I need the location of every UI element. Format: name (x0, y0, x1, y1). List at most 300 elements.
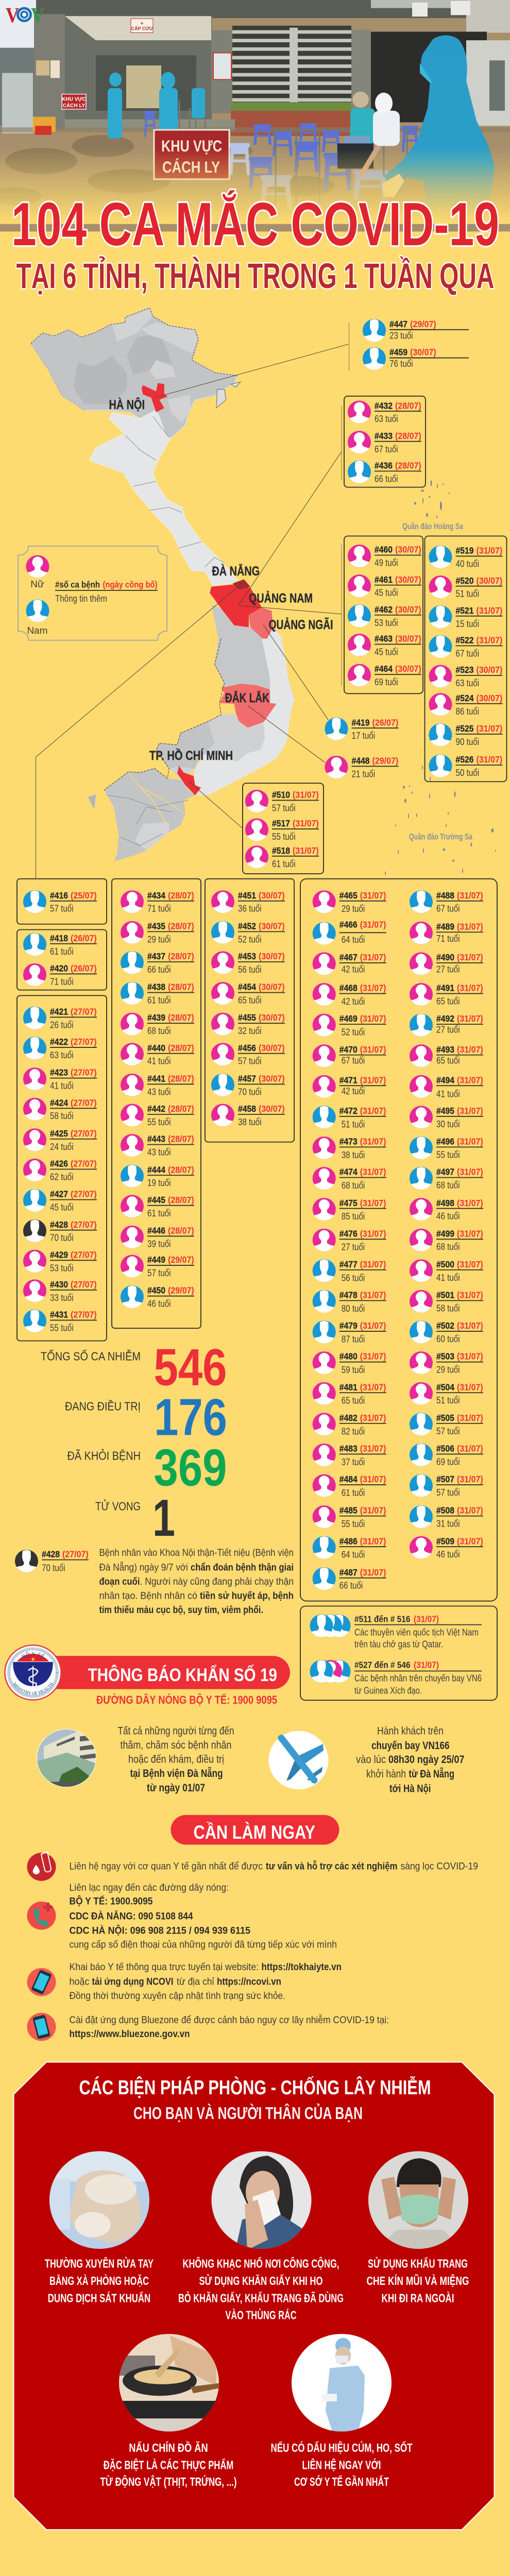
action: contact health agency: Liên hệ ngay với cơ quan Y tế gần nhất để được (69, 1861, 263, 1872)
region: Đà Nẵng (232, 580, 250, 590)
panel: Quảng Nam cases 30/07 (344, 536, 423, 693)
case #517: (31/07) (293, 818, 319, 828)
case #519: 40 tuổi (455, 558, 479, 569)
imported: seafarers #511-516: (31/07) (414, 1614, 439, 1624)
icon: phone and medical cross (27, 1902, 56, 1930)
case #429: #429 (50, 1250, 68, 1260)
legend panel (18, 546, 167, 640)
case #443 (121, 1134, 194, 1158)
case #437: 66 tuổi (147, 964, 171, 975)
imported: seafarers #511-516 (309, 1614, 482, 1649)
imported: seafarers #511-516: trên tàu chở gas từ Qatar. (354, 1639, 443, 1649)
logo: VOV: V (6, 3, 19, 27)
case #489: #489 (436, 922, 454, 932)
case #500: (31/07) (457, 1259, 483, 1269)
case #441 (121, 1074, 194, 1097)
emergency sign: CẤP CỨU (131, 26, 152, 31)
case #497: #497 (436, 1167, 454, 1177)
case #493: 65 tuổi (436, 1055, 460, 1066)
case #434: #434 (147, 890, 166, 901)
text: hospital visitors: từ ngày 01/07 (147, 1781, 205, 1794)
case #523: #523 (455, 665, 474, 675)
case #474: (31/07) (360, 1167, 386, 1177)
caption: wash hands (45, 2256, 154, 2305)
case #452: #452 (238, 921, 256, 931)
stat: under treatment (65, 1387, 227, 1446)
region: Hà Nội (142, 383, 167, 412)
case #502: (31/07) (457, 1320, 483, 1331)
action: contact health agency: sàng lọc COVID-19 (401, 1861, 478, 1872)
case #457: 70 tuổi (238, 1087, 262, 1097)
small quarantine sign (62, 94, 86, 109)
case #428: #428 (50, 1219, 68, 1230)
logo: VOV: V (31, 3, 44, 27)
case #471: #471 (339, 1075, 358, 1086)
case #457: (30/07) (259, 1074, 285, 1084)
case #479: 87 tuổi (342, 1334, 365, 1345)
case #430: 33 tuổi (50, 1292, 74, 1303)
case #446 (121, 1226, 194, 1249)
case #499: #499 (436, 1229, 454, 1239)
case #472: #472 (339, 1106, 358, 1116)
case #450 (120, 1285, 194, 1309)
case #482: (31/07) (360, 1413, 386, 1423)
case #436: 66 tuổi (375, 473, 398, 484)
case #448 (Đắk Lắk): (29/07) (372, 756, 398, 766)
case #486: 64 tuổi (342, 1549, 365, 1560)
action: online health declaration (69, 1961, 342, 2002)
case #427: (27/07) (71, 1189, 97, 1199)
case #508 (409, 1505, 483, 1529)
case #526: #526 (455, 754, 474, 765)
imported: flight VN6 #527-546: (31/07) (414, 1660, 439, 1670)
caption: no spitting: VÀO THÙNG RÁC (226, 2308, 297, 2322)
case #460: #460 (375, 545, 393, 555)
case #424: 58 tuổi (50, 1111, 74, 1122)
case #427 (23, 1189, 97, 1213)
case #454 (211, 982, 285, 1006)
case #441: 43 tuổi (147, 1087, 171, 1097)
case #424 (23, 1098, 97, 1122)
Mekong delta (104, 768, 195, 861)
case #499: 68 tuổi (436, 1242, 460, 1252)
stat: deaths: TỬ VONG (95, 1499, 141, 1513)
case #471: 42 tuổi (342, 1086, 365, 1096)
legend: male icon (26, 600, 49, 622)
text: flight VN166 passengers: từ Đà Nẵng (409, 1767, 454, 1780)
case #446: #446 (147, 1226, 165, 1236)
caption: contact a health facility: NẾU CÓ DẤU HIỆU CÚM, HO, SỐT (271, 2441, 413, 2455)
case #492: #492 (436, 1013, 454, 1024)
case #458: 38 tuổi (238, 1117, 262, 1127)
case #451: (30/07) (259, 890, 285, 901)
case #422 (23, 1037, 97, 1060)
case #463 (348, 634, 421, 657)
large quarantine sign (154, 130, 229, 179)
case #505: (31/07) (457, 1413, 483, 1423)
case #428: (27/07) (71, 1219, 97, 1230)
case #498: 46 tuổi (436, 1211, 460, 1222)
case #490: #490 (436, 952, 454, 962)
action: contact health agency (69, 1860, 478, 1872)
case #452: (30/07) (259, 921, 285, 931)
case #447: (29/07) (410, 319, 436, 329)
case #500 (410, 1259, 483, 1283)
text: flight VN166 passengers: vào lúc (356, 1753, 386, 1766)
case #496 (409, 1137, 483, 1160)
region: Đắk Lắk (219, 684, 277, 727)
case #424: #424 (50, 1098, 69, 1108)
case #488: #488 (436, 890, 454, 901)
case #504 (410, 1382, 483, 1406)
icon: mobile phone 2 (27, 2013, 56, 2041)
case #470: (31/07) (360, 1044, 386, 1055)
case #418: 61 tuổi (50, 946, 74, 957)
case #482: #482 (339, 1413, 358, 1423)
photo fade into page background (0, 148, 510, 224)
case #425: #425 (50, 1128, 68, 1139)
case #473: 38 tuổi (342, 1150, 365, 1160)
islands: Trường Sa (385, 766, 496, 875)
case #495: 30 tuổi (436, 1118, 460, 1129)
case #423 (23, 1067, 97, 1091)
case #492: 27 tuổi (436, 1024, 460, 1035)
case #501: #501 (436, 1290, 454, 1300)
stat: under treatment: 176 (154, 1387, 227, 1446)
photo: cooking in a pan (119, 2334, 219, 2432)
case #524: #524 (455, 693, 474, 703)
caption: contact a health facility: LIÊN HỆ NGAY VỚI (302, 2458, 381, 2472)
case #517 (245, 818, 319, 842)
case #455 (211, 1012, 285, 1037)
case #494: #494 (436, 1075, 455, 1086)
case #426: (27/07) (71, 1159, 97, 1169)
case #453: 56 tuổi (238, 964, 262, 975)
case #458 (211, 1104, 285, 1127)
case #467: (31/07) (360, 952, 386, 962)
case #447: 23 tuổi (389, 330, 413, 341)
case #455: #455 (238, 1012, 256, 1023)
case #461 (348, 574, 421, 598)
stat: recovered (67, 1438, 227, 1497)
case #460 (348, 545, 421, 568)
action: online health declaration: hoặc (69, 1976, 90, 1988)
case #498 (410, 1198, 483, 1222)
case #501: 58 tuổi (436, 1303, 460, 1314)
photo: doctor in blue gown (292, 2334, 392, 2432)
case #479 (312, 1320, 386, 1345)
case #462: (30/07) (395, 604, 421, 615)
panel: imported cases (300, 1606, 497, 1700)
case #461: 45 tuổi (375, 587, 398, 598)
case #485 (313, 1505, 386, 1529)
imported: flight VN6 #527-546: từ Guinea Xích đạo. (354, 1685, 422, 1696)
caption: wear a mask: SỬ DỤNG KHẨU TRANG (368, 2256, 468, 2271)
case #435: (28/07) (168, 921, 194, 931)
case #504: (31/07) (457, 1382, 483, 1393)
case #518: (31/07) (293, 845, 319, 856)
case #520: (30/07) (476, 575, 502, 586)
case #484 (313, 1474, 386, 1498)
panel: Đà Nẵng cases 30/07 (205, 879, 294, 1142)
case #503: 29 tuổi (436, 1364, 460, 1375)
case #443: (28/07) (168, 1134, 194, 1144)
action: online health declaration: từ địa chỉ (177, 1976, 214, 1988)
case #426: 62 tuổi (50, 1172, 74, 1182)
case #505: #505 (436, 1413, 454, 1423)
action: online health declaration: https://ncovi.vn (217, 1976, 281, 1988)
death case #428 detail: #428 (42, 1549, 60, 1560)
case #429: (27/07) (71, 1250, 97, 1260)
case #442: 55 tuổi (147, 1117, 171, 1127)
case #478: 80 tuổi (342, 1303, 365, 1314)
case #437 (120, 951, 194, 975)
case #507: (31/07) (457, 1474, 483, 1484)
case #485: 55 tuổi (342, 1519, 365, 1529)
action: hotlines: Liên lạc ngay đến các đường dây nóng: (69, 1882, 229, 1893)
case #436: #436 (375, 461, 393, 471)
action: hotlines: BỘ Y TẾ: 1900.9095 (69, 1895, 152, 1907)
caption: cook food thoroughly: NẤU CHÍN ĐỒ ĂN (129, 2441, 208, 2455)
case #449: 57 tuổi (147, 1268, 171, 1278)
case #451 (211, 890, 285, 914)
panel: Đà Nẵng cases 27/07 (17, 995, 107, 1341)
case #508: 31 tuổi (436, 1518, 460, 1529)
case #485: #485 (339, 1505, 358, 1516)
case #455: 32 tuổi (238, 1026, 262, 1037)
case #441: (28/07) (168, 1074, 194, 1084)
action: install Bluezone (69, 2014, 389, 2040)
panel: TP. Hồ Chí Minh cases (243, 783, 324, 874)
case #418: (26/07) (71, 933, 97, 943)
map label: TP. Hồ Chí Minh: TP. HỒ CHÍ MINH (149, 748, 233, 763)
case #420: (26/07) (71, 963, 97, 974)
case #522: #522 (455, 635, 474, 646)
case #470: #470 (339, 1044, 358, 1055)
case #449 (121, 1255, 194, 1278)
case #484: (31/07) (360, 1474, 386, 1484)
caption: contact a health facility (271, 2441, 413, 2489)
case #425: (27/07) (71, 1128, 97, 1139)
case #485: (31/07) (360, 1505, 386, 1516)
case #469: #469 (339, 1013, 358, 1024)
case #461: #461 (375, 574, 393, 585)
case #436 (347, 461, 421, 484)
map label: Hà Nội: HÀ NỘI (109, 397, 145, 412)
case #492: (31/07) (457, 1014, 483, 1024)
case #430: (27/07) (71, 1279, 97, 1290)
case #420: 71 tuổi (50, 976, 74, 987)
case #488 (409, 890, 483, 914)
case #506 (409, 1444, 483, 1467)
case #498: #498 (436, 1198, 454, 1208)
case #462: 53 tuổi (375, 617, 398, 628)
case #507: #507 (436, 1474, 454, 1484)
case #460: (30/07) (395, 545, 421, 555)
fence (179, 100, 428, 207)
case #519 (429, 546, 503, 569)
case #518 (245, 845, 319, 869)
map label: Quảng Ngãi: QUẢNG NGÃI (269, 617, 333, 632)
case #519: (31/07) (476, 546, 502, 556)
case #461: (30/07) (395, 574, 421, 585)
case #423: #423 (50, 1067, 68, 1078)
imported: seafarers #511-516: #511 đến # 516 (354, 1614, 411, 1624)
case #449: (29/07) (168, 1255, 194, 1265)
case #440: #440 (147, 1043, 165, 1053)
case #498: (31/07) (457, 1198, 483, 1208)
case #526: 50 tuổi (455, 768, 479, 778)
case #445: #445 (147, 1195, 165, 1205)
caption: no spitting: BỎ KHĂN GIẤY, KHẨU TRANG ĐÃ DÙNG (178, 2291, 344, 2305)
case #441: #441 (147, 1074, 165, 1084)
case #422: (27/07) (71, 1037, 97, 1047)
caption: no spitting (178, 2257, 344, 2322)
caption: no spitting: KHÔNG KHẠC NHỔ NƠI CÔNG CỘNG, (182, 2257, 339, 2271)
case #510 (245, 790, 319, 814)
case #434 (121, 890, 194, 914)
connector lines from map regions to case panels (36, 323, 349, 879)
case #489: 71 tuổi (436, 933, 460, 944)
case #475: 85 tuổi (342, 1211, 365, 1222)
case #432: (28/07) (395, 401, 421, 411)
large quarantine sign: KHU VỰC (161, 137, 222, 155)
case #477: #477 (339, 1259, 358, 1269)
case #443: #443 (147, 1134, 165, 1144)
case #473: #473 (339, 1137, 358, 1147)
panel: Hà Nội cases (362, 319, 469, 370)
text: hospital visitors: hoặc đến khám, điều trị (128, 1752, 224, 1765)
case #465: #465 (339, 890, 358, 901)
case #456: (30/07) (259, 1043, 285, 1053)
case #421 (23, 1007, 97, 1030)
caption: wash hands: DUNG DỊCH SÁT KHUẨN (48, 2291, 150, 2305)
map label: Đà Nẵng: ĐÀ NẴNG (212, 564, 260, 579)
hotline: ĐƯỜNG DÂY NÓNG BỘ Y TẾ: 1900 9095 (96, 1693, 277, 1706)
case #466: #466 (339, 920, 358, 930)
case #474 (313, 1167, 386, 1191)
case #440 (121, 1043, 194, 1066)
case #447 (362, 319, 469, 342)
caption: wear a mask: KHI ĐI RA NGOÀI (381, 2291, 454, 2305)
case #453: (30/07) (259, 951, 285, 961)
case #446: (28/07) (168, 1226, 194, 1236)
caption: contact a health facility: CƠ SỞ Y TẾ GẦN NHẤT (294, 2474, 389, 2489)
case #420 (23, 963, 97, 987)
caption: wear a mask (367, 2256, 469, 2305)
case #469 (313, 1013, 386, 1038)
case #481 (313, 1382, 386, 1406)
action: install Bluezone: https://www.bluezone.gov.vn (69, 2028, 190, 2040)
caption: wash hands: THƯỜNG XUYÊN RỬA TAY (45, 2256, 154, 2271)
islands (216, 389, 226, 408)
logo: Ministry of Health: BỘ Y TẾ (21, 1652, 45, 1659)
case #470: 67 tuổi (342, 1055, 365, 1066)
case #422: 63 tuổi (50, 1050, 74, 1060)
case #472: (31/07) (360, 1106, 386, 1116)
case #418: #418 (50, 933, 68, 943)
case #447: #447 (389, 319, 407, 329)
case #491: #491 (436, 983, 454, 993)
case #522 (429, 635, 503, 659)
case #416 (23, 890, 97, 914)
case #494: 41 tuổi (436, 1089, 460, 1099)
medical staff in blue suits (108, 72, 205, 139)
case #467 (313, 952, 386, 975)
case #480 (313, 1351, 386, 1375)
case #453: #453 (238, 951, 256, 961)
text: hospital visitors: Tất cả những người từng đến (117, 1724, 234, 1737)
legend: text key (55, 580, 158, 604)
case #523: (30/07) (476, 665, 502, 675)
case #501 (410, 1290, 483, 1314)
case #445: (28/07) (168, 1195, 194, 1205)
case #507 (409, 1474, 483, 1498)
case #521 (429, 605, 503, 629)
case #457: #457 (238, 1074, 256, 1084)
case #487: #487 (339, 1567, 358, 1578)
case #473 (313, 1137, 386, 1160)
case #520: 51 tuổi (455, 588, 479, 599)
legend panel: Nam (27, 625, 48, 636)
poster (213, 53, 231, 79)
text: hospital visitors: tại Bệnh viện Đà Nẵng (130, 1767, 223, 1780)
case #482 (313, 1413, 386, 1437)
case #444: #444 (147, 1164, 166, 1175)
case #460: 49 tuổi (375, 557, 398, 568)
map label: Quảng Nam: QUẢNG NAM (249, 590, 313, 605)
islands: Hoàng Sa (402, 480, 463, 531)
case #505: 57 tuổi (436, 1426, 460, 1436)
title (11, 190, 499, 296)
case #458: (30/07) (259, 1104, 285, 1114)
case #448 (Đắk Lắk): #448 (351, 756, 370, 766)
case #476: 27 tuổi (342, 1242, 365, 1252)
case #438: 61 tuổi (147, 995, 171, 1006)
action: hotlines: CDC HÀ NỘI: 096 908 2115 / 094 939 6115 (69, 1924, 250, 1936)
case #518: 61 tuổi (272, 858, 296, 869)
small quarantine sign: KHU VỰC (62, 96, 86, 102)
case #439 (121, 1012, 194, 1037)
case #497 (409, 1167, 483, 1191)
case #437: #437 (147, 951, 165, 961)
case #487 (312, 1567, 386, 1591)
case #483: #483 (339, 1444, 358, 1454)
text: flight VN166 passengers: chuyến bay VN166 (371, 1739, 449, 1752)
yellow and red bins (33, 117, 56, 135)
case #483 (313, 1444, 386, 1467)
case #520: #520 (455, 575, 474, 586)
case #481: #481 (339, 1382, 358, 1393)
case #425 (23, 1128, 97, 1152)
case #451: 36 tuổi (238, 903, 262, 914)
case #525 (429, 723, 503, 747)
case #496: 55 tuổi (436, 1149, 460, 1160)
case #525: (31/07) (476, 723, 502, 734)
case #496: #496 (436, 1137, 454, 1147)
case #464: #464 (375, 664, 393, 674)
case #439: 68 tuổi (147, 1026, 171, 1037)
action: online health declaration: https://tokhaiyte.vn (262, 1961, 342, 1973)
case #445: 61 tuổi (147, 1208, 171, 1218)
case #521: 15 tuổi (455, 618, 479, 629)
legend: text key: Thông tin thêm (55, 593, 107, 604)
case #444 (120, 1164, 194, 1189)
case #426 (23, 1159, 97, 1182)
case #433: 67 tuổi (375, 444, 398, 454)
case #436: (28/07) (395, 461, 421, 471)
case #494: (31/07) (457, 1075, 483, 1086)
